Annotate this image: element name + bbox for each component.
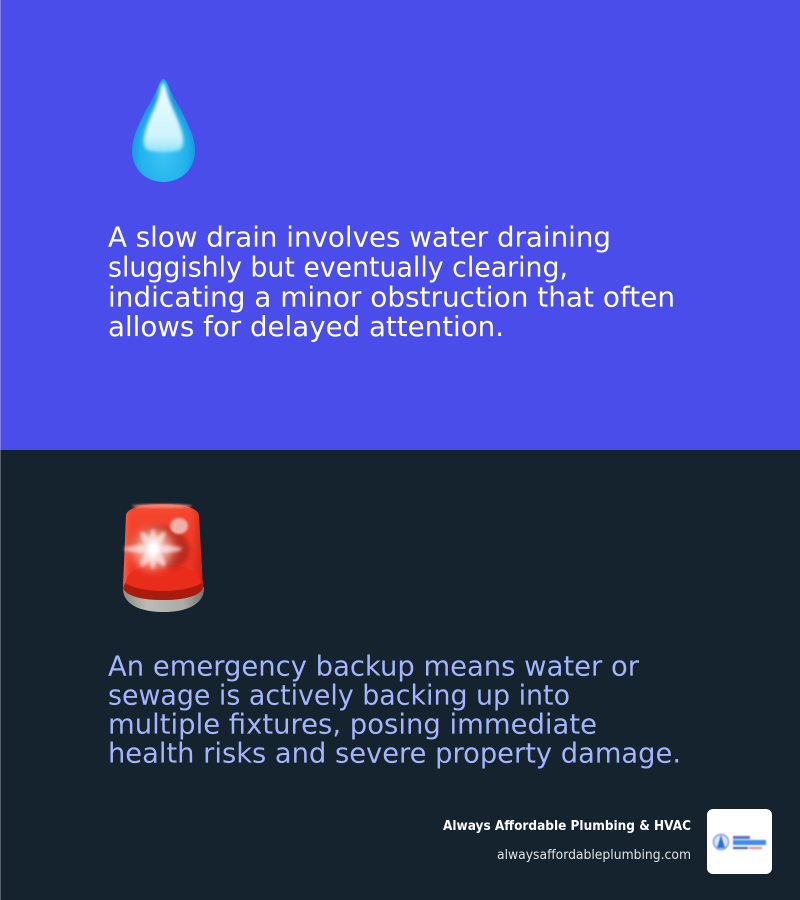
footer: website: alwaysaffordableplumbing.com	[497, 848, 691, 863]
footer: company name: Always Affordable Plumbing & HVAC	[443, 819, 691, 834]
icon: red emergency beacon	[123, 504, 204, 612]
text: emergency backup description: sewage is actively backing up into	[108, 678, 570, 712]
text: slow drain description: allows for delayed attention.	[108, 310, 504, 343]
text: slow drain description: sluggishly but eventually clearing,	[108, 250, 568, 284]
text: slow drain description: A slow drain involves water draining	[108, 220, 611, 254]
text: emergency backup description	[108, 650, 681, 770]
panel: slow drain	[0, 0, 800, 450]
text: emergency backup description: An emergency backup means water or	[108, 650, 639, 682]
text: emergency backup description: health risks and severe property damage.	[108, 736, 681, 770]
icon: water drop	[132, 79, 195, 182]
text: slow drain description	[108, 220, 675, 343]
text: emergency backup description: multiple fixtures, posing immediate	[108, 708, 597, 740]
left edge strip	[0, 0, 1, 900]
icon: company logo	[707, 809, 772, 874]
panel: emergency backup	[0, 450, 800, 900]
text: slow drain description: indicating a minor obstruction that often	[108, 280, 675, 314]
